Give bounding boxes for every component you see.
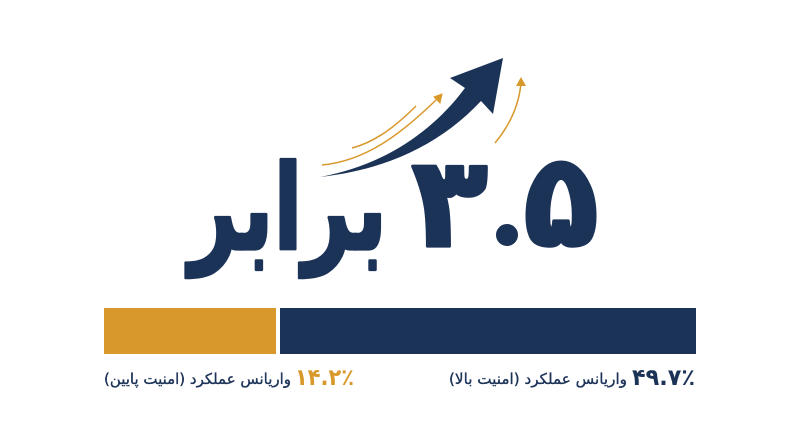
heading decimal point bbox=[498, 226, 516, 244]
heading digit five: ۵ bbox=[523, 125, 599, 276]
label: low security description: واریانس عملکرد (امنیت پایین) bbox=[104, 370, 291, 389]
icon: right gold arrow bbox=[495, 77, 526, 143]
label: low security value: ۱۴.۲٪ bbox=[295, 365, 354, 391]
heading digit three: ۳ bbox=[411, 130, 488, 276]
label: high security description: واریانس عملکرد (امنیت بالا) bbox=[449, 370, 627, 388]
label: high security value: ۴۹.۷٪ bbox=[632, 365, 695, 391]
bar: high security bbox=[280, 308, 696, 354]
heading: 3.5 times bbox=[185, 125, 599, 278]
heading word times: برابر bbox=[185, 140, 387, 278]
icon: rising navy arrow bbox=[320, 58, 503, 177]
bar: low security bbox=[104, 308, 276, 354]
icon: short gold swoosh bbox=[352, 106, 416, 148]
icon: long gold arrow bbox=[322, 94, 442, 165]
